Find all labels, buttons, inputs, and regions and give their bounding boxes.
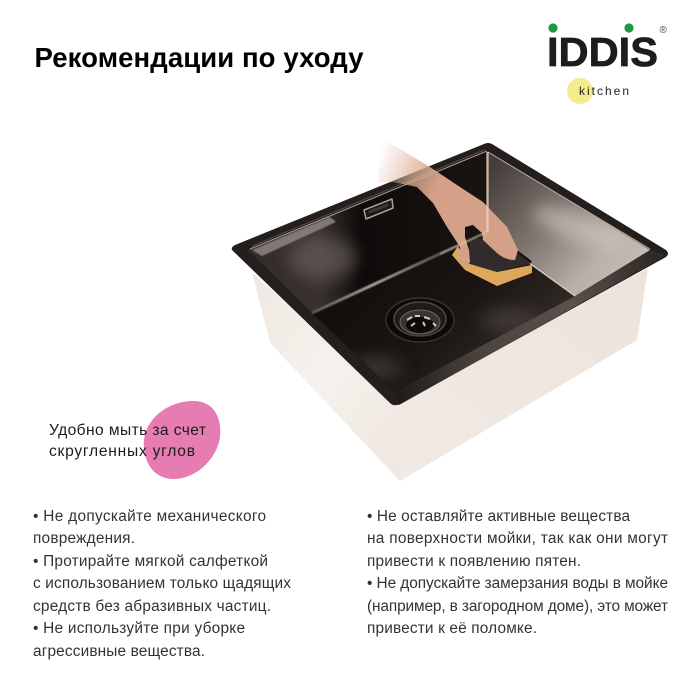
left care recommendations text: • Протирайте мягкой салфеткой <box>33 553 268 570</box>
sponge <box>452 235 532 286</box>
right care recommendations text: • Не допускайте замерзания воды в мойке <box>367 575 668 592</box>
left care recommendations text: повреждения. <box>33 530 135 547</box>
logo kitchen caption: kitchen <box>579 84 629 98</box>
right care recommendations text: привести к её поломке. <box>367 620 537 637</box>
callout: rounded corners <box>49 401 220 479</box>
left care recommendations text: агрессивные вещества. <box>33 643 205 660</box>
left care recommendations text: средств без абразивных частиц. <box>33 598 271 615</box>
right care recommendations text: • Не оставляйте активные вещества <box>367 508 630 525</box>
hand holding sponge <box>378 137 518 268</box>
left care recommendations text <box>33 508 291 660</box>
right care recommendations text: на поверхности мойки, так как они могут <box>367 530 668 547</box>
drain strainer <box>386 298 454 342</box>
overflow slot <box>364 199 393 219</box>
title: Рекомендации по уходу <box>34 42 364 73</box>
callout text: Удобно мыть за счет <box>49 422 206 439</box>
sink outer body <box>252 268 648 481</box>
left care recommendations text: с использованием только щадящих <box>33 575 291 592</box>
right care recommendations text: (например, в загородном доме), это может <box>367 598 668 615</box>
callout text <box>49 422 206 460</box>
callout pink blob <box>144 401 220 479</box>
corner reflections over hand <box>252 150 488 254</box>
right care recommendations text: привести к появлению пятен. <box>367 553 581 570</box>
logo wordmark: IDDIS <box>547 29 658 75</box>
right care recommendations text <box>367 508 668 637</box>
logo wordmark: ® <box>660 25 668 36</box>
logo yellow blob <box>567 78 593 104</box>
sink rim <box>232 143 668 405</box>
left care recommendations text: • Не допускайте механического <box>33 508 266 525</box>
sink illustration <box>232 137 668 481</box>
logo: IDDIS kitchen <box>547 23 668 104</box>
sink front rim band <box>395 250 667 405</box>
callout text: скругленных углов <box>49 443 195 460</box>
left care recommendations text: • Не используйте при уборке <box>33 620 245 637</box>
sink bowl interior <box>248 151 650 392</box>
